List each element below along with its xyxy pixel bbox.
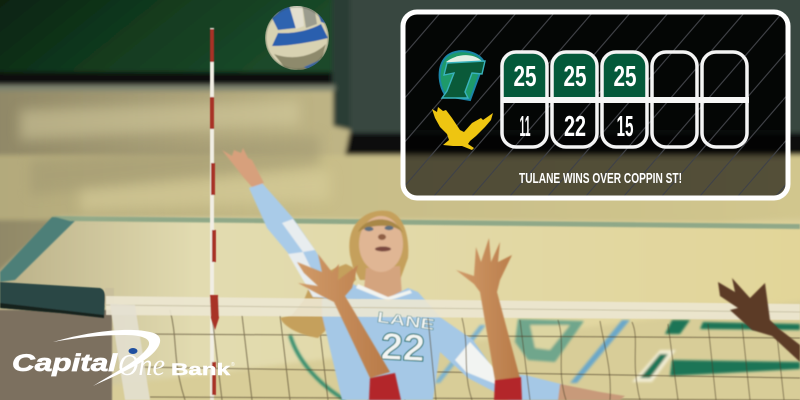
white sleeve segments xyxy=(282,219,325,297)
score divider xyxy=(501,97,749,103)
score cell 2 xyxy=(552,52,597,147)
logo swoosh xyxy=(53,330,160,386)
raised hand xyxy=(222,148,264,187)
logo registered mark: ® xyxy=(231,361,235,368)
raised arm sleeve xyxy=(249,183,340,298)
score cell 2: 25 xyxy=(564,61,586,93)
score cell 1: 11 xyxy=(520,111,530,143)
score cell 3: 25 xyxy=(614,61,636,93)
score cell 4 empty xyxy=(652,52,697,147)
lower left dark floor xyxy=(0,310,112,400)
jersey xyxy=(322,283,565,400)
blocker right arm and hand xyxy=(456,238,522,400)
court logo painted on floor xyxy=(290,319,800,400)
player: main hitter xyxy=(222,148,625,400)
floor streaks xyxy=(20,100,330,212)
face xyxy=(359,216,403,272)
net top band xyxy=(106,295,800,400)
Capital One Bank logo xyxy=(12,330,235,386)
score cell 5 empty xyxy=(702,52,747,147)
score cell 3: 15 xyxy=(616,111,634,143)
neck xyxy=(364,266,402,300)
logo dot xyxy=(128,348,138,354)
result caption: TULANE WINS OVER COPPIN ST! xyxy=(519,170,682,187)
score cell 1: 25 xyxy=(514,61,536,93)
hair xyxy=(280,211,408,338)
blocker left arm and hand xyxy=(297,254,401,400)
jersey lettering xyxy=(376,309,436,370)
score cell 3 xyxy=(602,52,647,147)
court boundary lines xyxy=(0,216,800,282)
net mesh xyxy=(140,310,800,400)
jersey lettering: 22 xyxy=(380,326,426,370)
far side blocker hand xyxy=(718,278,800,362)
volleyball xyxy=(265,3,329,72)
net mesh over player xyxy=(428,318,784,400)
logo word Bank: Bank xyxy=(171,360,231,379)
score cell 2: 22 xyxy=(564,111,586,143)
scoreboard panel xyxy=(403,12,788,198)
score cell 1 xyxy=(502,52,547,147)
jersey lettering: LANE xyxy=(376,309,436,334)
antenna pole xyxy=(210,28,216,400)
Tulane logo xyxy=(440,51,485,100)
logo word Capital: Capital xyxy=(12,350,119,377)
Coppin State eagle logo xyxy=(432,107,493,150)
net cord pad xyxy=(0,282,114,318)
logo word One: One xyxy=(118,347,165,382)
forearm and hand at right xyxy=(558,384,625,400)
